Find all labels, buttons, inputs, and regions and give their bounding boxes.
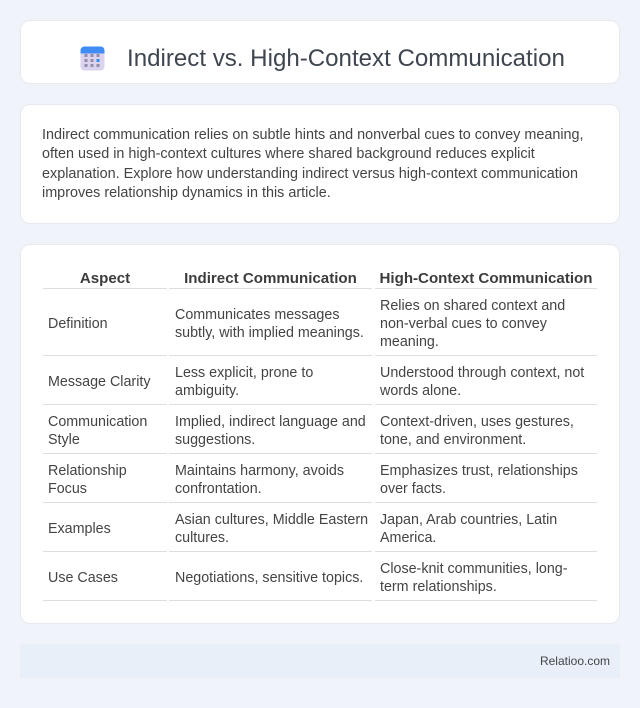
footer	[20, 644, 620, 678]
row: definition: Definition	[48, 316, 108, 332]
intro text: often used in high-context cultures where shared background reduces explicit	[42, 146, 535, 162]
table header: High-Context Communication	[380, 270, 592, 287]
panel: title card	[20, 20, 620, 84]
row: examples	[48, 512, 557, 546]
row: relationship focus: Relationship	[48, 463, 127, 479]
intro text: Indirect communication relies on subtle hints and nonverbal cues to convey meaning,	[42, 127, 584, 143]
panel: comparison table	[20, 244, 620, 624]
intro text: improves relationship dynamics in this article.	[42, 185, 331, 201]
table header	[80, 270, 592, 287]
row: definition: meaning.	[380, 334, 439, 350]
row: use cases: Negotiations, sensitive topics.	[175, 570, 363, 586]
row: communication style: Communication	[48, 414, 147, 430]
row: message clarity: Less explicit, prone to	[175, 365, 313, 381]
row: relationship focus: confrontation.	[175, 481, 262, 497]
row: examples: Asian cultures, Middle Eastern	[175, 512, 368, 528]
row: definition: subtly, with implied meanings.	[175, 325, 364, 341]
row: definition: non-verbal cues to convey	[380, 316, 547, 332]
row: message clarity: words alone.	[380, 383, 461, 399]
row: communication style: tone, and environment.	[380, 432, 526, 448]
row: definition: Relies on shared context and	[380, 298, 565, 314]
row: communication style: Style	[48, 432, 80, 448]
row: message clarity: Understood through context, not	[380, 365, 584, 381]
row: examples: America.	[380, 530, 436, 546]
row: communication style: Implied, indirect language and	[175, 414, 366, 430]
row: use cases: Close-knit communities, long-	[380, 561, 568, 577]
icon: calendar	[80, 46, 104, 70]
row: message clarity: Message Clarity	[48, 374, 150, 390]
intro text	[42, 127, 584, 201]
row: message clarity: ambiguity.	[175, 383, 239, 399]
row: examples: Japan, Arab countries, Latin	[380, 512, 557, 528]
row: relationship focus: Focus	[48, 481, 87, 497]
row: relationship focus: over facts.	[380, 481, 446, 497]
row: use cases: Use Cases	[48, 570, 118, 586]
row: relationship focus: Maintains harmony, avoids	[175, 463, 344, 479]
table header: Aspect	[80, 270, 130, 287]
intro text: explanation. Explore how understanding indirect versus high-context communication	[42, 166, 578, 182]
table header: Indirect Communication	[184, 270, 357, 287]
row: message clarity	[48, 365, 584, 399]
row: use cases: term relationships.	[380, 579, 497, 595]
row: definition: Communicates messages	[175, 307, 339, 323]
row: communication style: Context-driven, uses gestures,	[380, 414, 574, 430]
row: relationship focus: Emphasizes trust, relationships	[380, 463, 578, 479]
row: definition	[48, 298, 565, 350]
row: communication style: suggestions.	[175, 432, 255, 448]
row: use cases	[48, 561, 568, 595]
row: examples: cultures.	[175, 530, 229, 546]
title: Indirect vs. High-Context Communication	[127, 45, 565, 72]
row: examples: Examples	[48, 521, 111, 537]
footer brand: Relatioo.com	[540, 654, 610, 668]
panel: intro	[20, 104, 620, 224]
row: communication style	[48, 414, 574, 448]
row: relationship focus	[48, 463, 578, 497]
